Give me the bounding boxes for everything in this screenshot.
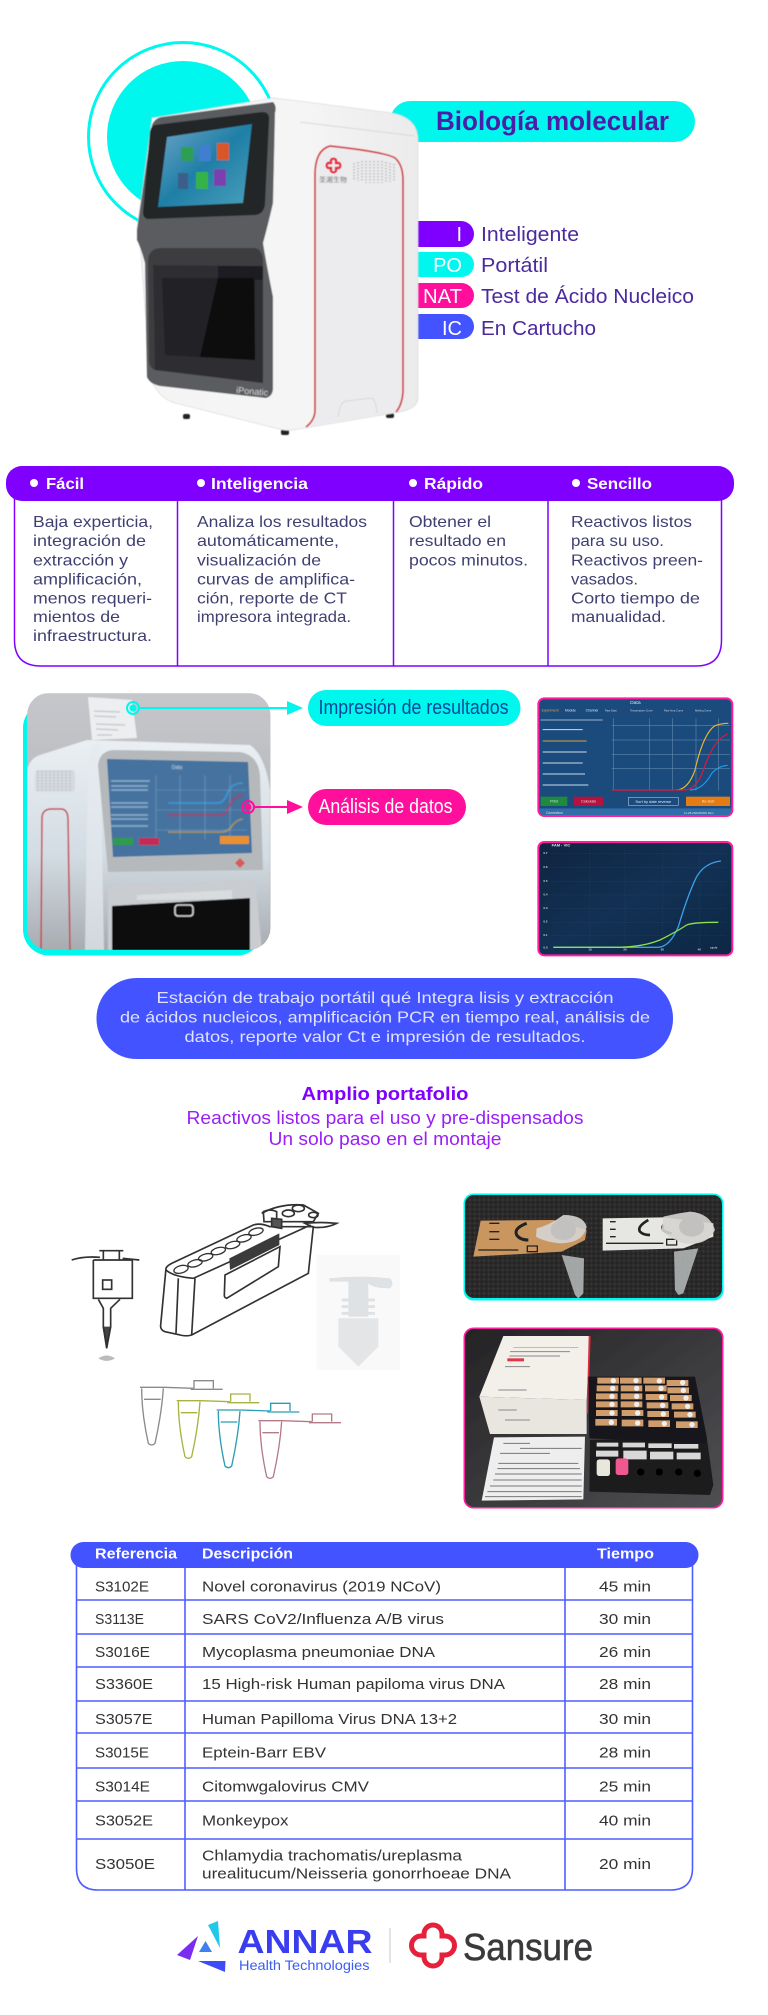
- row S3014E: Citomwgalovirus CMV: [202, 1778, 369, 1796]
- instrument body: [27, 740, 270, 950]
- icon: Sansure cross: [412, 1925, 454, 1966]
- callout: Impresión de resultados: Impresión de resultados: [318, 697, 508, 719]
- row S3050E: [95, 1848, 651, 1882]
- row S3057E: S3057E: [95, 1711, 152, 1728]
- table header: [70, 1542, 698, 1568]
- column text: Inteligencia: curvas de amplifica-: [197, 572, 355, 588]
- side panel and red trim: [306, 146, 403, 427]
- status light: [177, 253, 228, 258]
- row S3052E: 40 min: [599, 1812, 651, 1830]
- chart buttons: Print: [550, 800, 558, 804]
- column text: Inteligencia: automáticamente,: [197, 533, 339, 550]
- chart buttons: 11:28 2023/06/06 Mon: [684, 811, 714, 815]
- second amplification chart screenshot: [538, 842, 732, 955]
- legend item: Inteligente: I: [456, 224, 462, 246]
- upper foam rack with labelled tubes: [588, 1377, 707, 1443]
- row S3113E: [95, 1611, 651, 1628]
- column text: Fácil: [33, 514, 153, 645]
- table header: Referencia: [95, 1546, 178, 1562]
- amplification chart screenshot: Data: [630, 700, 641, 706]
- column text: Sencillo: Corto tiempo de: [571, 590, 700, 608]
- row S3015E: 28 min: [599, 1744, 651, 1762]
- features table: [6, 466, 734, 666]
- chart buttons: [539, 797, 731, 815]
- column text: Sencillo: Reactivos preen-: [571, 552, 703, 570]
- column text: Fácil: integración de: [33, 533, 146, 550]
- amplification chart screenshot: Module: [565, 709, 576, 713]
- row S3102E: Novel coronavirus (2019 NCoV): [202, 1578, 441, 1596]
- heading: Amplio portafolio: Amplio portafolio: [302, 1084, 469, 1104]
- row S3050E: S3050E: [95, 1856, 155, 1873]
- photo: labelled tubes: [463, 1193, 724, 1300]
- column text: Inteligencia: Analiza los resultados: [197, 514, 367, 531]
- column text: Inteligencia: ción, reporte de CT: [197, 590, 347, 608]
- legend item: Test de Ácido Nucleico: [400, 283, 694, 308]
- description callout: workstation: Estación de trabajo portátil qué Integra lisis y extracción: [156, 990, 614, 1007]
- icon: pipette: [72, 1251, 139, 1361]
- icon: pale tube illustration: [317, 1255, 400, 1370]
- legend item: En Cartucho: En Cartucho: [481, 318, 596, 340]
- speaker grille: [35, 770, 75, 792]
- column text: Fácil: Baja experticia,: [33, 514, 153, 531]
- legend: I PO NAT IC: [400, 221, 694, 340]
- touch screen: [158, 124, 252, 207]
- legend item: Inteligente: Inteligente: [481, 224, 579, 246]
- logo on instrument: [319, 159, 347, 184]
- legend item: En Cartucho: IC: [442, 318, 462, 340]
- column text: Fácil: infraestructura.: [33, 628, 152, 645]
- row S3016E: S3016E: [95, 1644, 150, 1661]
- table frame and column dividers: [14, 490, 722, 666]
- column text: Rápido: Obtener el: [409, 514, 491, 531]
- description callout: workstation: de ácidos nucleicos, amplificación PCR en tiempo real, análisis de: [120, 1010, 650, 1026]
- row S3014E: [95, 1778, 651, 1796]
- description callout: workstation: datos, reporte valor Ct e impresión de resultados.: [184, 1029, 586, 1046]
- model name: iPonatic: [236, 385, 269, 398]
- second amplification chart screenshot: 0.6: [543, 865, 548, 869]
- title pill: Biología molecular: Biología molecular: [436, 106, 669, 136]
- second amplification chart screenshot: 20: [623, 948, 627, 952]
- row S3057E: [95, 1711, 651, 1728]
- table header: Descripción: [202, 1546, 293, 1562]
- printed paper: [88, 697, 137, 740]
- logo: Sansure: [390, 1925, 593, 1969]
- illustration: reagent cartridge and pipette: [72, 1205, 400, 1478]
- second amplification chart screenshot: 0.4: [543, 892, 548, 896]
- callout: Análisis de datos: [242, 789, 466, 825]
- row S3057E: 30 min: [599, 1711, 651, 1728]
- decorative cyan ring and disc behind instrument: [88, 42, 278, 232]
- chart buttons: Re-Sort: [702, 800, 714, 804]
- icon: coloured PCR tubes: [140, 1381, 341, 1478]
- small logo: [235, 858, 245, 868]
- second amplification chart screenshot: 0.5: [543, 879, 548, 883]
- row S3113E: S3113E: [95, 1611, 144, 1628]
- instructions sheet: [482, 1437, 585, 1501]
- column text: Sencillo: Reactivos listos: [571, 514, 692, 531]
- vials: [597, 1459, 610, 1476]
- column text: Inteligencia: impresora integrada.: [197, 609, 351, 626]
- table header bar: Fácil: [46, 476, 84, 493]
- subheading text: Un solo paso en el montaje: [268, 1129, 502, 1149]
- photo panel: instrument printing results: [23, 693, 271, 956]
- amplification chart screenshot: Melting Curve: [695, 708, 712, 712]
- column text: Fácil: menos requeri-: [33, 590, 152, 608]
- logo: Sansure: Sansure: [463, 1927, 593, 1969]
- legend item: Portátil: [400, 252, 548, 277]
- lower foam rack: [589, 1437, 713, 1495]
- callout: Análisis de datos: Análisis de datos: [318, 796, 452, 818]
- amplification chart screenshot: Experiment: [542, 709, 559, 713]
- legend item: Inteligente: [400, 221, 579, 247]
- screen bezel: [143, 112, 269, 219]
- body: [137, 98, 418, 430]
- row S3015E: S3015E: [95, 1744, 149, 1762]
- row S3050E: urealitucum/Neisseria gonorrhoeae DNA: [202, 1866, 511, 1882]
- screen bezel: [98, 750, 263, 872]
- row S3050E: Chlamydia trachomatis/ureplasma: [202, 1848, 463, 1864]
- title pill: Biología molecular: [390, 101, 695, 142]
- column text: Fácil: mientos de: [33, 609, 120, 626]
- logo: ANNAR Health Technologies: ANNAR: [238, 1923, 373, 1960]
- callout: Impresión de resultados: [127, 690, 520, 726]
- sample door: [148, 248, 263, 383]
- table header bar: Rápido: [424, 476, 483, 493]
- row S3016E: [95, 1644, 651, 1661]
- screen buttons: [113, 836, 249, 845]
- second amplification chart screenshot: 0.2: [543, 920, 548, 924]
- row S3102E: [95, 1578, 651, 1596]
- photo panel: instrument printing results: Data: [172, 765, 182, 771]
- lower drawer: [108, 894, 262, 950]
- second amplification chart screenshot: 0.1: [543, 933, 548, 937]
- kit box: [479, 1336, 590, 1400]
- subheading text: Reactivos listos para el uso y pre-dispensados: [186, 1108, 584, 1128]
- row S3113E: SARS CoV2/Influenza A/B virus: [202, 1611, 444, 1628]
- legend item: Portátil: PO: [433, 255, 462, 277]
- table header bar: Inteligencia: [211, 476, 308, 493]
- row S3360E: 28 min: [599, 1676, 651, 1693]
- tan label: [473, 1220, 587, 1257]
- row S3113E: 30 min: [599, 1611, 651, 1628]
- legend item: En Cartucho: [400, 314, 596, 340]
- amplification chart screenshot: Raw Data: [605, 708, 617, 712]
- row S3360E: [95, 1676, 651, 1693]
- row S3057E: Human Papilloma Virus DNA 13+2: [202, 1711, 457, 1728]
- subheading text: [186, 1108, 584, 1149]
- legend item: Test de Ácido Nucleico: NAT: [423, 286, 462, 308]
- description callout: workstation: [96, 978, 673, 1059]
- column text: Sencillo: manualidad.: [571, 609, 666, 626]
- column text: Sencillo: para su uso.: [571, 533, 664, 550]
- second amplification chart screenshot: 10: [588, 948, 592, 952]
- amplification chart screenshot: Temperature Curve: [630, 708, 653, 712]
- reference table: [70, 1542, 698, 1890]
- row S3102E: 45 min: [599, 1578, 651, 1596]
- feet: [183, 413, 394, 435]
- screen app icons: [178, 143, 229, 189]
- amplification chart screenshot: [538, 698, 732, 816]
- logo: ANNAR Health Technologies: [177, 1921, 373, 1973]
- row S3052E: [95, 1812, 651, 1830]
- table grid: [76, 1560, 692, 1890]
- legend item: Portátil: Portátil: [481, 255, 548, 277]
- column text: Inteligencia: visualización de: [197, 552, 321, 570]
- row S3014E: S3014E: [95, 1778, 150, 1796]
- column text: Rápido: [409, 514, 528, 570]
- icon: ANNAR triangles: [177, 1921, 226, 1972]
- column text: Fácil: amplificación,: [33, 572, 142, 588]
- second amplification chart screenshot: 30: [661, 948, 664, 952]
- table header bar: [6, 466, 734, 501]
- row S3016E: 26 min: [599, 1644, 651, 1661]
- instrument screen: [107, 759, 252, 857]
- table header: Tiempo: [597, 1546, 654, 1562]
- table header bar: Sencillo: [587, 476, 652, 493]
- chart buttons: Calculate: [581, 800, 596, 804]
- row S3360E: S3360E: [95, 1676, 153, 1693]
- amplification chart screenshot: Sort by date reverse: [635, 799, 672, 804]
- speaker grille: [354, 161, 394, 183]
- row S3102E: S3102E: [95, 1578, 149, 1596]
- instrument illustration: iPonatic: [137, 98, 418, 435]
- photo: kit contents: [463, 1327, 724, 1510]
- logo on instrument: 圣湘生物: [319, 175, 347, 184]
- column text: Rápido: pocos minutos.: [409, 552, 528, 570]
- row S3015E: [95, 1744, 651, 1762]
- amplification chart screenshot: Raw Amp Curve: [664, 708, 684, 712]
- red trim: [41, 809, 70, 950]
- column text: Fácil: extracción y: [33, 552, 128, 570]
- column text: Sencillo: [571, 514, 703, 626]
- legend item: Test de Ácido Nucleico: Test de Ácido Nucleico: [481, 285, 694, 308]
- second amplification chart screenshot: 0.7: [543, 851, 548, 855]
- second amplification chart screenshot: 0.3: [543, 906, 548, 910]
- logo: ANNAR Health Technologies: Health Technologies: [239, 1957, 370, 1973]
- row S3014E: 25 min: [599, 1778, 651, 1796]
- column text: Inteligencia: [197, 514, 367, 626]
- chart buttons: Connection: [546, 811, 563, 815]
- second amplification chart screenshot: FAM · VIC: [552, 843, 570, 848]
- amplification chart screenshot: Channel: [586, 709, 598, 713]
- second amplification chart screenshot: 40: [698, 948, 701, 952]
- second amplification chart screenshot: 0.0: [543, 946, 548, 950]
- icon: cartridge: [161, 1205, 337, 1336]
- tubes: [562, 1255, 584, 1298]
- column text: Rápido: resultado en: [409, 533, 506, 550]
- row S3360E: 15 High-risk Human papiloma virus DNA: [202, 1676, 505, 1693]
- column text: Sencillo: vasados.: [571, 572, 638, 588]
- row S3050E: 20 min: [599, 1856, 651, 1873]
- white label: [603, 1217, 713, 1251]
- second amplification chart screenshot: cycle: [710, 946, 718, 950]
- dark front face: [137, 102, 276, 398]
- row S3052E: Monkeypox: [202, 1812, 289, 1830]
- row S3015E: Eptein-Barr EBV: [202, 1744, 326, 1762]
- row S3052E: S3052E: [95, 1812, 153, 1830]
- row S3016E: Mycoplasma pneumoniae DNA: [202, 1644, 435, 1661]
